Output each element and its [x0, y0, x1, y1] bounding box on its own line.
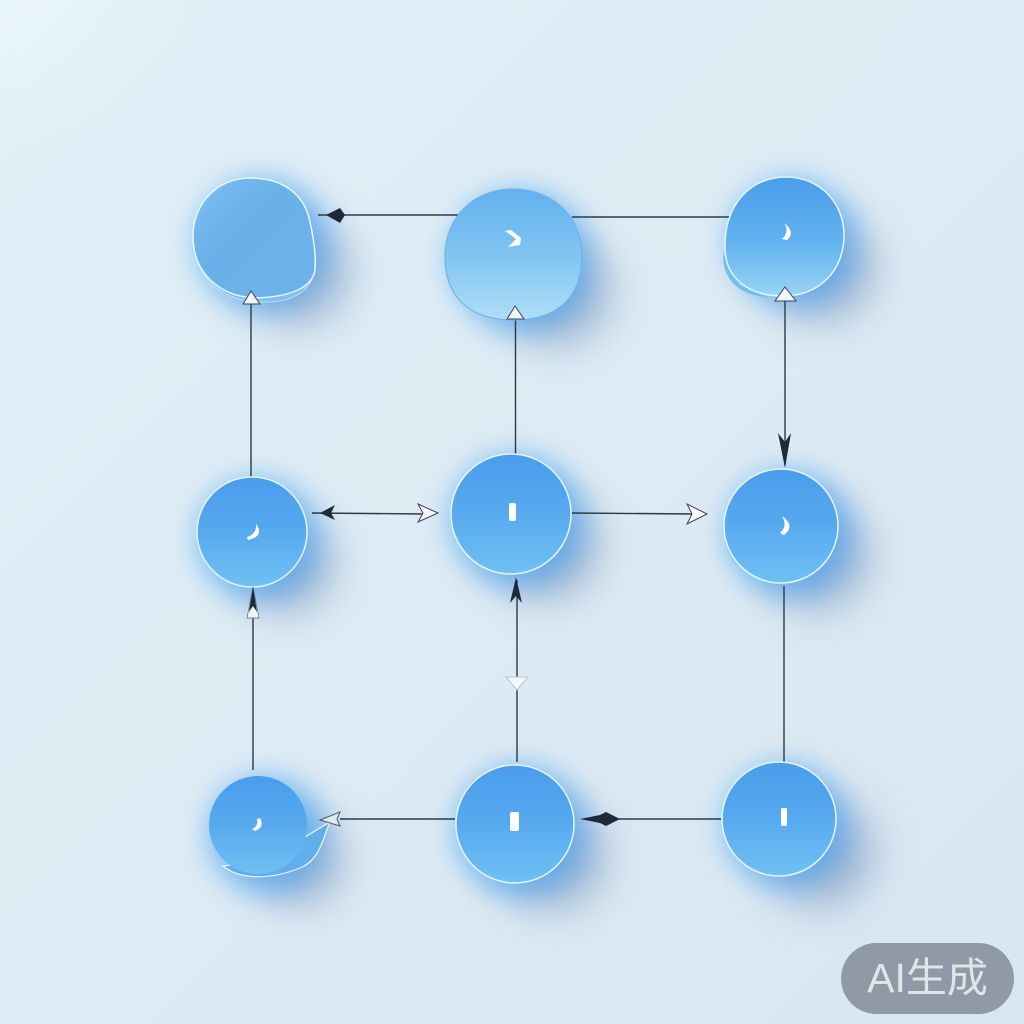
node glows [196, 178, 855, 895]
node: bottom middle [456, 765, 574, 883]
node: center [451, 454, 571, 574]
badge: AI generated [841, 943, 1014, 1014]
node: middle right [724, 469, 838, 584]
node: bottom left [209, 776, 330, 877]
arrowheads [243, 208, 796, 826]
node: middle left [197, 477, 307, 587]
node shadows [239, 216, 874, 908]
node: bottom right [722, 762, 836, 876]
node: top middle [445, 189, 582, 320]
node: top right [723, 177, 844, 298]
badge: AI generated: AI生成 [867, 955, 988, 1001]
connector lines [251, 215, 785, 819]
node: top left [193, 178, 315, 302]
